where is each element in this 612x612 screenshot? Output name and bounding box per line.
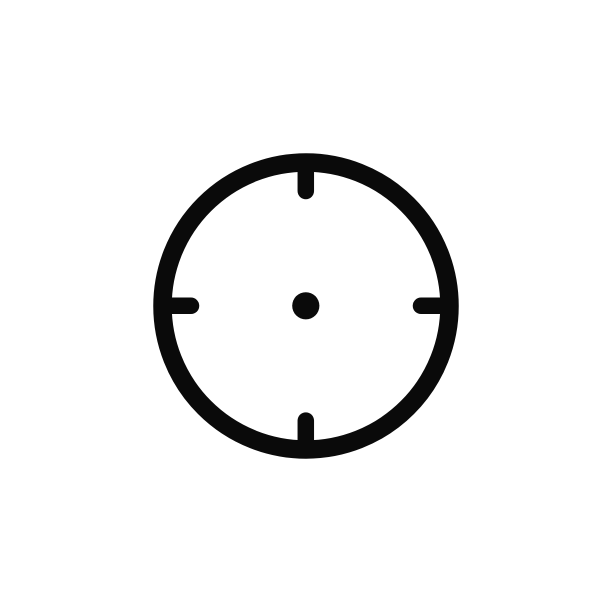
center dot	[292, 292, 319, 319]
tick: top	[298, 162, 314, 191]
tick: left	[162, 298, 191, 314]
tick: right	[421, 298, 450, 314]
tick: bottom	[298, 421, 314, 450]
outer ring	[162, 162, 450, 450]
